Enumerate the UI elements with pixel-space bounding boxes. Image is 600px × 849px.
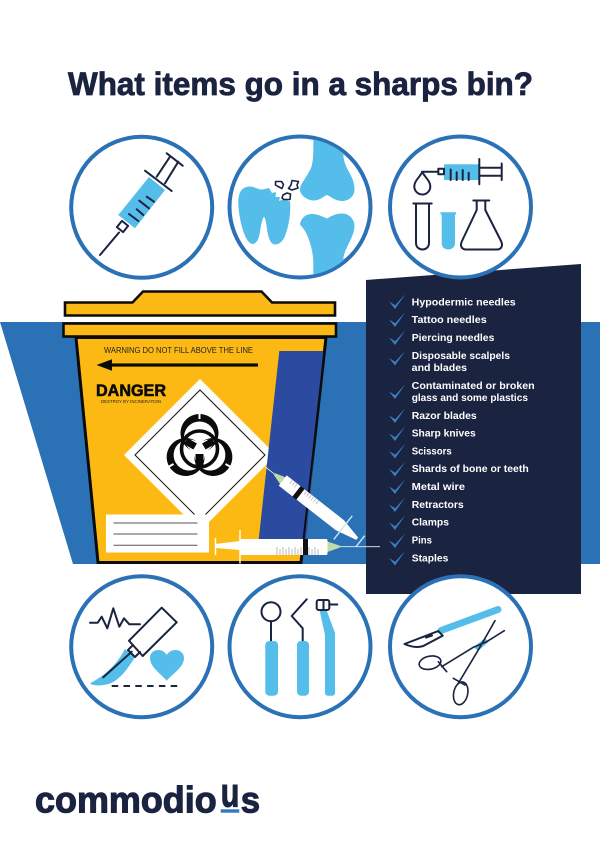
bone fragments [276,180,298,200]
dashed line [112,685,180,687]
icon: horizontal syringe [216,530,380,564]
scalpel handle [441,610,498,630]
dental probe [292,599,309,696]
dental mirror [262,602,280,696]
flask [461,200,502,250]
checklist items: Hypodermic needles [412,296,516,308]
checklist items: Disposable scalpels [412,350,510,362]
icon circle: syringe [71,137,212,278]
bin right edge [301,338,326,562]
icon circle: scalpel and heart [71,576,212,717]
checklist items: Clamps [412,517,449,529]
checklist items: Contaminated or broken [412,380,535,392]
test tube outline [413,204,432,250]
heart [150,650,184,681]
scalpel blade [90,649,135,685]
syringe outline [100,153,183,255]
hazard diamond [124,379,276,531]
white label with lines [106,514,209,552]
check marks [389,294,406,566]
filled test tube [440,212,456,250]
checklist items: Tattoo needles [412,314,487,326]
tooth [238,186,290,244]
checklist items: and blades [412,362,467,374]
dental drill [317,600,337,696]
logo: commodious: commodio [35,780,217,821]
pulse line [90,608,140,628]
checklist items [412,296,535,564]
icon circle: tooth and bone [230,130,370,285]
checklist items: glass and some plastics [412,392,528,404]
icon circle: scalpel and forceps [390,576,531,717]
icon: biohazard symbol [160,413,239,483]
checklist items: Pins [412,534,432,546]
icon: diagonal syringe [256,455,370,553]
checklist items: Metal wire [412,481,465,493]
panel: sharps bin [64,292,336,562]
checklist items: Razor blades [412,410,477,422]
checklist items: Piercing needles [412,332,495,344]
scalpel handle [103,608,177,677]
panel: checklist [366,264,581,594]
icon circle: dental tools [230,576,370,717]
checklist items: Retractors [412,499,464,511]
title: What items go in a sharps bin? [68,66,533,102]
bin upper lid [65,292,335,316]
arrow: fill line [96,359,258,371]
dark blue side panel [257,351,323,555]
bin body [76,338,326,562]
checklist items: Sharp knives [412,428,476,440]
icon circle: laboratory [390,136,531,278]
upper and lower bone [300,140,354,275]
background blue band [0,322,600,564]
logo underline [221,809,239,813]
bin lower lid [64,324,336,336]
destroy by incineration note: DESTROY BY INCINERATION [101,399,161,404]
checklist background [366,264,581,594]
checklist items: Scissors [412,445,452,457]
logo: commodious [35,770,260,821]
lab syringe [414,159,502,194]
logo: commodious: u [221,770,239,816]
checklist items: Staples [412,552,449,564]
forceps [418,621,504,706]
warning text: WARNING DO NOT FILL ABOVE THE LINE [104,346,253,355]
scalpel blade [404,631,443,647]
syringe barrel [118,177,165,228]
logo: commodious: s [241,780,260,821]
danger heading: DANGER [96,381,166,400]
checklist items: Shards of bone or teeth [412,463,529,475]
